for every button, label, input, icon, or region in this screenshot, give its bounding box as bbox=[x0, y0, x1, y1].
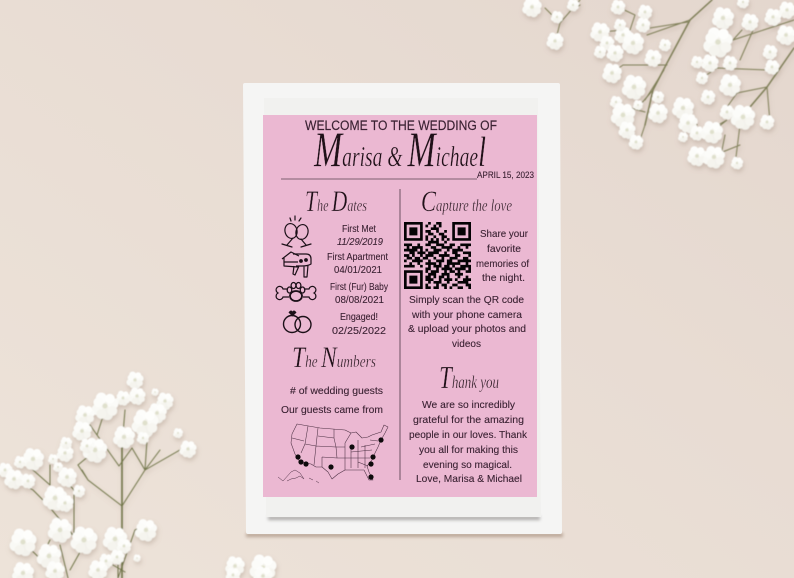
text: wedding guests: # of wedding guests bbox=[290, 385, 383, 397]
text: thank you message bbox=[409, 399, 528, 485]
text: share memories: memories of bbox=[476, 258, 529, 270]
label: first apartment: First Apartment bbox=[327, 251, 388, 263]
label: first apartment: 04/01/2021 bbox=[334, 264, 382, 276]
text: thank you message: evening so magical. bbox=[423, 459, 512, 471]
label: first apartment bbox=[327, 251, 388, 276]
icon: house and key bbox=[282, 252, 311, 277]
couple names: Marisa & Michael bbox=[313, 121, 486, 177]
text: thank you message: people in our loves. Thank bbox=[409, 429, 528, 441]
QR code bbox=[404, 223, 471, 288]
text: scan instructions bbox=[408, 294, 526, 350]
label: first met: First Met bbox=[342, 223, 376, 235]
icon: rings bbox=[284, 310, 311, 332]
header rule bbox=[281, 178, 477, 180]
icon: champagne glasses bbox=[282, 216, 311, 247]
text: thank you message: We are so incredibly bbox=[422, 399, 516, 411]
label: engaged: 02/25/2022 bbox=[332, 325, 386, 337]
label: first met bbox=[337, 223, 383, 248]
inner white paper bbox=[264, 98, 541, 520]
label: first fur baby: 08/08/2021 bbox=[335, 294, 384, 306]
text: share memories: Share your bbox=[480, 228, 528, 240]
flowers: bottom centre bbox=[225, 555, 276, 578]
panel: thank you bbox=[409, 359, 528, 485]
heading: thank you: Thank you bbox=[439, 359, 499, 395]
label: first fur baby: First (Fur) Baby bbox=[330, 281, 389, 293]
text: guests came from: Our guests came from bbox=[281, 404, 383, 416]
panel: the numbers bbox=[278, 341, 388, 483]
text: scan instructions: & upload your photos and bbox=[408, 323, 526, 335]
chart: US map with pins bbox=[278, 424, 388, 483]
text: share memories: favorite bbox=[487, 243, 521, 255]
pink program card bbox=[263, 115, 537, 497]
flowers: bottom left bbox=[0, 371, 197, 578]
text: thank you message: grateful for the amazing bbox=[413, 414, 524, 426]
text: thank you message: you all for making this bbox=[419, 444, 518, 456]
date: APRIL 15, 2023 bbox=[477, 170, 534, 181]
outer white card bbox=[243, 83, 563, 537]
panel: capture the love bbox=[404, 185, 529, 350]
label: engaged bbox=[332, 311, 386, 337]
icon: paw and bones bbox=[276, 282, 316, 301]
heading: capture the love: Capture the love bbox=[421, 185, 512, 218]
panel: the dates bbox=[276, 185, 389, 337]
column divider bbox=[399, 189, 401, 480]
text: share memories: the night. bbox=[482, 272, 525, 284]
text: thank you message: Love, Marisa & Michael bbox=[416, 473, 522, 485]
flowers: top right bbox=[522, 0, 794, 169]
label: engaged: Engaged! bbox=[340, 311, 378, 323]
text: scan instructions: Simply scan the QR code bbox=[409, 294, 524, 306]
title: WELCOME TO THE WEDDING OF bbox=[305, 118, 497, 133]
heading: the numbers: The Numbers bbox=[292, 341, 376, 374]
text: scan instructions: videos bbox=[452, 338, 481, 350]
text: share memories bbox=[476, 228, 529, 284]
label: first fur baby bbox=[330, 281, 389, 306]
text: scan instructions: with your phone camera bbox=[411, 309, 522, 321]
heading: the dates: The Dates bbox=[305, 185, 367, 218]
label: first met: 11/29/2019 bbox=[337, 236, 383, 248]
